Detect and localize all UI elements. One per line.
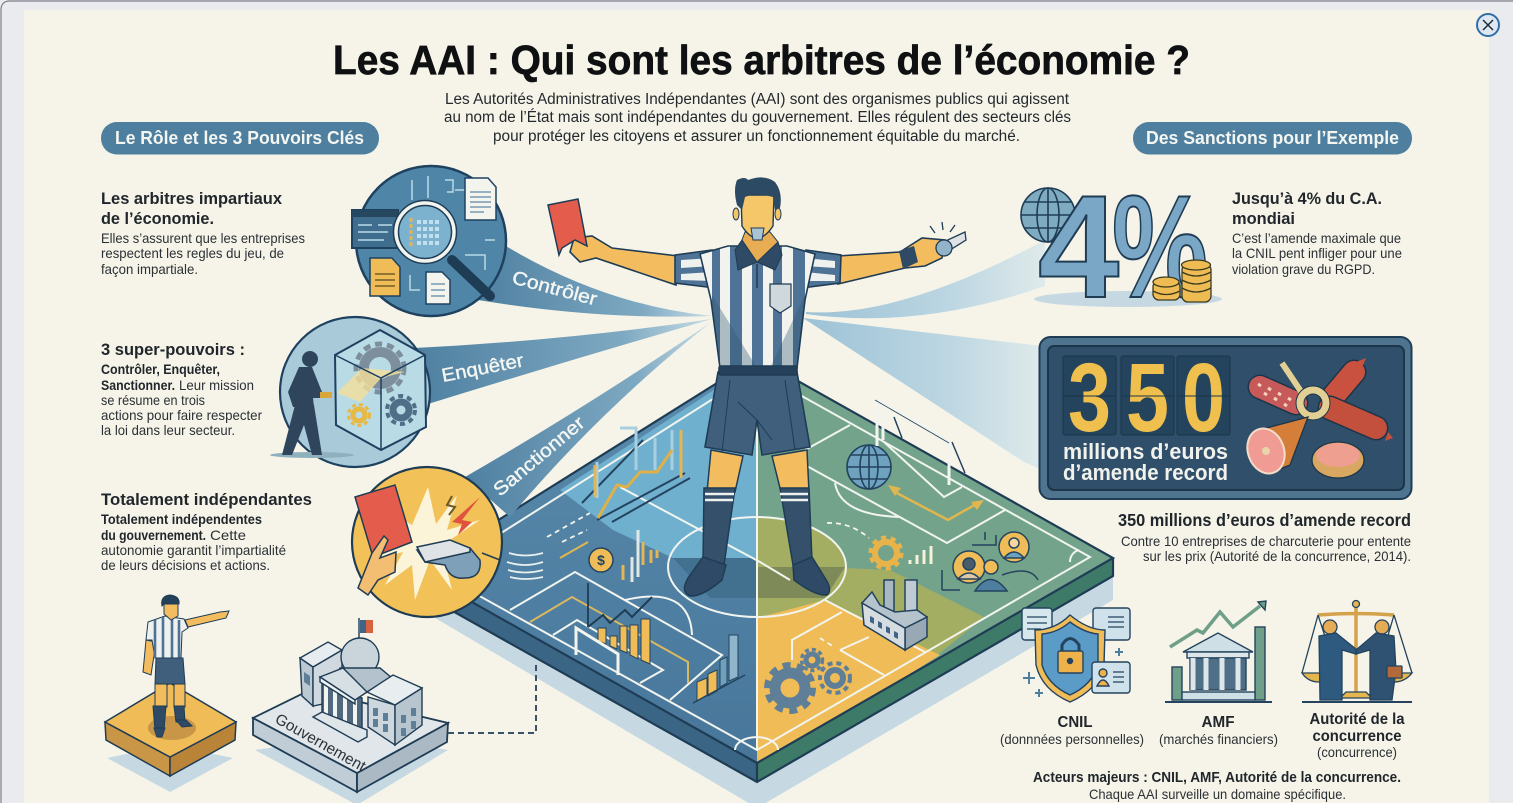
coins	[1153, 260, 1211, 302]
shirt	[700, 240, 815, 370]
actor: AMF	[1159, 601, 1278, 747]
digit 0: 0	[1182, 343, 1225, 452]
text block: 4 percent: violation grave du RGPD.	[1232, 261, 1375, 277]
pill heading: role	[101, 122, 379, 154]
text block: super powers: Contrôler, Enquêter,	[101, 361, 220, 377]
portico	[313, 668, 367, 742]
circle icon: control	[352, 166, 506, 316]
shoes	[684, 557, 830, 596]
field shadow	[425, 575, 1113, 803]
actor: CNIL: (donnnées personnelles)	[1000, 731, 1144, 747]
text block: independent: du gouvernement.	[101, 527, 206, 543]
glass cube	[335, 330, 426, 450]
text block: major actors: Chaque AAI surveille un domaine spécifique.	[1089, 786, 1346, 802]
pate	[1312, 442, 1364, 478]
document top	[465, 178, 496, 220]
pill heading: sanctions	[1133, 122, 1412, 154]
text block: independent: de leurs décisions et actions.	[101, 557, 270, 573]
text block: 4 percent: C’est l’amende maximale que	[1232, 230, 1401, 246]
wristband	[899, 246, 918, 269]
plinth	[253, 690, 448, 792]
pitch lines	[438, 371, 1090, 750]
left arm	[570, 236, 678, 285]
text block: record: sur les prix (Autorité de la concurrence, 2014).	[1143, 548, 1411, 564]
field icon: gears	[767, 650, 850, 711]
field icon: signal bars	[910, 546, 931, 564]
text block: 4 percent	[1232, 189, 1402, 277]
dashed connector	[448, 663, 536, 733]
scoreboard caption: millions d’euros	[1063, 439, 1228, 464]
text block: independent: Totalement indépendentes	[101, 511, 262, 527]
text block: super powers: 3 super-pouvoirs :	[101, 340, 245, 359]
text block: super powers: Sanctionner.	[101, 377, 175, 393]
text block: independent: Cette	[210, 527, 246, 543]
field icon: rising bars	[693, 635, 745, 703]
big number four: 4	[1038, 165, 1119, 328]
actor: competition authority	[1302, 600, 1412, 760]
field icon: coin	[589, 548, 613, 572]
text block: record: 350 millions d’euros d’amende record	[1118, 510, 1411, 530]
field icon: factory	[862, 580, 927, 650]
text block: super powers: se résume en trois	[101, 392, 205, 408]
plinth label: Gouvernement	[272, 711, 369, 776]
circle icon: investigate	[270, 317, 430, 467]
4 percent figure	[1021, 165, 1222, 328]
globe	[1021, 188, 1075, 242]
actor: AMF: AMF	[1202, 714, 1235, 731]
legs	[703, 450, 812, 565]
beam: Sanctionner: Sanctionner	[490, 412, 590, 501]
right arm	[838, 238, 945, 284]
sausage lower	[1330, 408, 1376, 428]
sausage top right	[1332, 372, 1354, 398]
right wing	[367, 675, 422, 745]
actor: competition authority: (concurrence)	[1317, 744, 1397, 760]
pill heading: role: Le Rôle et les 3 Pouvoirs Clés	[115, 127, 364, 148]
text block: impartial: respectent les regles du jeu, de	[101, 245, 284, 261]
beam: Enquêter	[415, 319, 712, 404]
pedestal	[105, 683, 236, 792]
text block: record	[1118, 510, 1411, 564]
pill heading: sanctions: Des Sanctions pour l’Exemple	[1146, 127, 1399, 148]
field icon: people	[942, 532, 1038, 591]
close button	[1477, 14, 1499, 36]
collar	[735, 240, 782, 270]
actor: CNIL	[1000, 608, 1144, 747]
scoreboard	[1040, 337, 1412, 499]
text block: independent	[101, 490, 312, 573]
beam: Contrôler: Contrôler	[510, 268, 600, 311]
big percent sign: %	[1112, 165, 1208, 328]
actor: AMF: (marchés financiers)	[1159, 731, 1278, 747]
flag	[360, 620, 373, 633]
referee	[548, 177, 966, 596]
text block: super powers	[101, 340, 262, 438]
field icon: trend chart	[582, 428, 690, 522]
text block: 4 percent: mondiai	[1232, 209, 1295, 228]
investigator figure	[270, 351, 354, 458]
left wing	[300, 642, 342, 706]
text block: super powers: Leur mission	[179, 377, 254, 393]
document yellow	[370, 258, 400, 296]
intro paragraph: au nom de l’État mais sont indépendantes du gouvernement. Elles régulent des secteurs clés	[444, 109, 1071, 126]
text block: impartial: de l’économie.	[101, 209, 214, 228]
field icon: bar chart with arrow	[576, 583, 652, 675]
CNIL icon	[1022, 608, 1130, 702]
title: Les AAI : Qui sont les arbitres de l’économie ?	[333, 37, 1190, 83]
rope	[1282, 363, 1302, 393]
document white	[426, 272, 450, 304]
intro paragraph: Les Autorités Administratives Indépendantes (AAI) sont des organismes publics qui agissent	[445, 91, 1070, 108]
text block: 4 percent: Jusqu’à 4% du C.A.	[1232, 189, 1382, 208]
tactical field	[417, 358, 1113, 782]
red card	[355, 485, 412, 557]
whistle held	[930, 222, 966, 256]
scoreboard: d’amende record	[1063, 460, 1228, 485]
text block: impartial: Les arbitres impartiaux	[101, 189, 283, 208]
text block: major actors: Acteurs majeurs : CNIL, AMF, Autorité de la concurrence.	[1033, 769, 1401, 786]
dome	[335, 618, 392, 692]
digit 3: 3	[1068, 343, 1111, 452]
magnifying glass	[394, 200, 490, 296]
head	[733, 177, 781, 262]
scales icon	[1302, 600, 1412, 702]
salami	[1260, 387, 1296, 403]
actor: CNIL: CNIL	[1058, 714, 1093, 731]
text block: super powers: actions pour faire respecter	[101, 407, 262, 423]
charcuterie	[1241, 358, 1393, 479]
text block: major actors	[1033, 769, 1401, 802]
beam: Contrôler	[478, 240, 712, 317]
shorts	[705, 366, 810, 455]
field icon: goal	[875, 400, 965, 485]
government building	[253, 618, 448, 803]
rays right	[803, 240, 1045, 470]
red lightning	[452, 497, 480, 535]
ham	[1252, 417, 1308, 473]
sock stripes	[705, 494, 808, 500]
intro paragraph	[444, 91, 1071, 145]
text block: independent: Totalement indépendantes	[101, 490, 312, 509]
whistle	[417, 540, 500, 578]
beam: Sanctionner	[465, 323, 710, 517]
text block: impartial	[101, 189, 305, 277]
actor: competition authority: Autorité de la	[1310, 711, 1405, 728]
text block: impartial: Elles s’assurent que les entreprises	[101, 230, 305, 246]
text block: super powers: la loi dans leur secteur.	[101, 422, 235, 438]
browser window	[352, 210, 398, 248]
badge	[770, 284, 791, 313]
actor: competition authority: concurrence	[1312, 728, 1402, 745]
AMF icon	[1165, 601, 1272, 702]
red card held	[548, 199, 587, 255]
text block: independent: autonomie garantit l’impartialité	[101, 542, 286, 558]
beam: Enquêter: Enquêter	[440, 350, 526, 387]
intro paragraph: pour protéger les citoyens et assurer un fonctionnement équitable du marché.	[493, 128, 1020, 145]
text block: record: Contre 10 entreprises de charcuterie pour entente	[1121, 533, 1411, 549]
sleeves	[675, 250, 841, 288]
field icon: coin: $	[597, 552, 605, 568]
text block: 4 percent: la CNIL pent infliger pour une	[1232, 245, 1402, 261]
text block: impartial: façon impartiale.	[101, 261, 198, 277]
field icon: gear	[871, 538, 901, 568]
figure	[143, 595, 229, 737]
hand	[358, 536, 396, 595]
small referee on pedestal	[105, 595, 236, 792]
circle icon: sanction	[352, 467, 502, 617]
digit 5: 5	[1126, 343, 1169, 452]
field icon: globe	[847, 445, 891, 489]
field icon: arrows	[888, 485, 984, 520]
field icon: candle chart	[623, 530, 657, 582]
